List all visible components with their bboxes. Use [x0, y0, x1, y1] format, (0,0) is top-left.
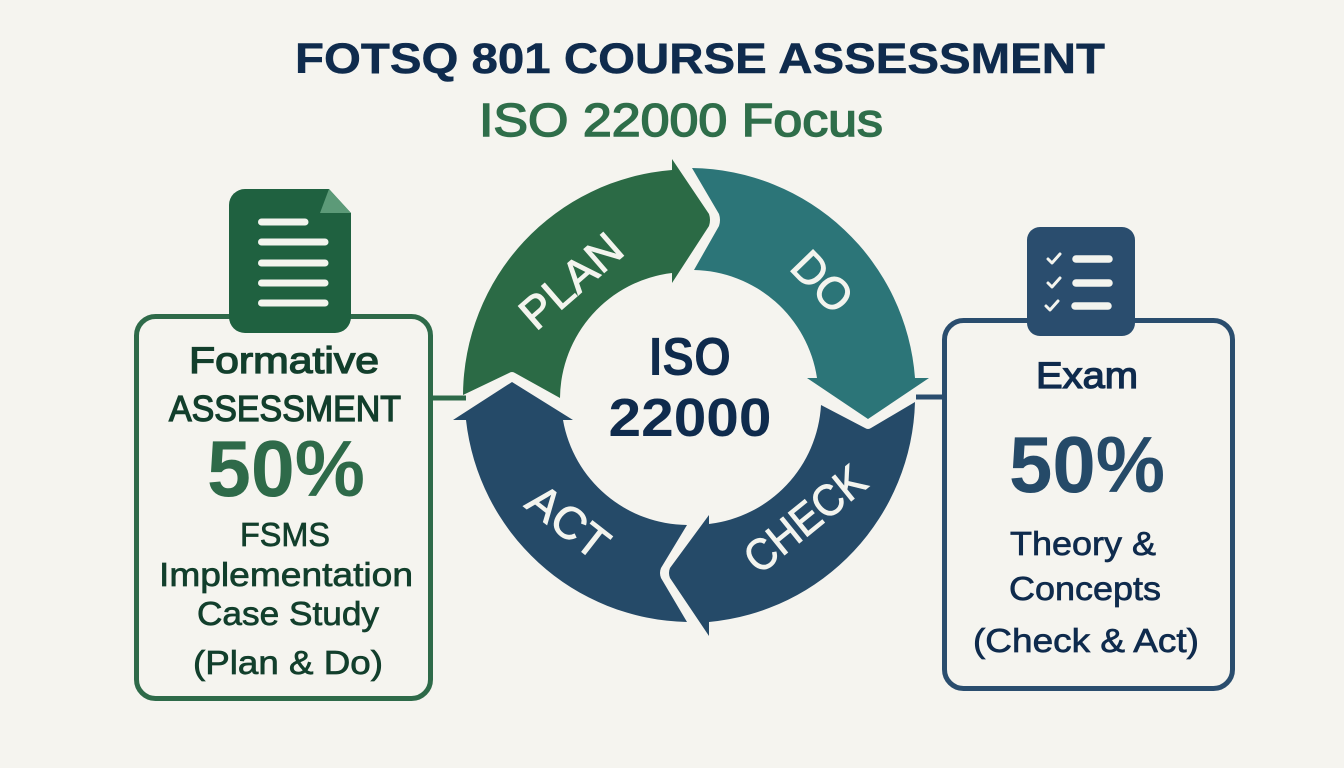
description: Implementation	[159, 556, 413, 593]
subtitle: ISO 22000 Focus	[479, 94, 883, 146]
description: FSMS	[240, 516, 330, 553]
description: Case Study	[197, 595, 380, 632]
arrow: plan: PLAN	[509, 222, 633, 339]
arrow: plan	[463, 159, 710, 398]
center label: ISO	[649, 327, 731, 387]
description: (Plan & Do)	[193, 644, 383, 681]
description: Theory &	[1010, 525, 1156, 562]
percentage: 50%	[1009, 420, 1165, 509]
center label	[608, 327, 772, 448]
description: Concepts	[1009, 570, 1161, 607]
arrow: act	[453, 382, 687, 622]
heading: formative: Formative	[189, 340, 379, 381]
arrow: act: ACT	[517, 474, 619, 569]
arrow: check	[669, 402, 915, 636]
panel: exam	[944, 227, 1232, 688]
panel: formative assessment	[136, 189, 430, 698]
description	[973, 525, 1199, 659]
arrow: do: DO	[781, 240, 864, 323]
center label: 22000	[608, 388, 772, 448]
percentage: 50%	[207, 424, 365, 513]
heading: assessment: ASSESSMENT	[169, 388, 401, 429]
PDCA cycle	[453, 159, 929, 636]
description	[159, 516, 413, 681]
connector lines	[430, 397, 946, 398]
title	[295, 35, 1105, 146]
title: FOTSQ 801 COURSE ASSESSMENT	[295, 35, 1105, 83]
icon: checklist	[1027, 227, 1135, 336]
arrow: check: CHECK	[735, 456, 876, 583]
heading: exam: Exam	[1036, 355, 1138, 396]
icon: document	[229, 189, 351, 333]
arrow: do	[692, 168, 929, 419]
description: (Check & Act)	[973, 622, 1199, 659]
